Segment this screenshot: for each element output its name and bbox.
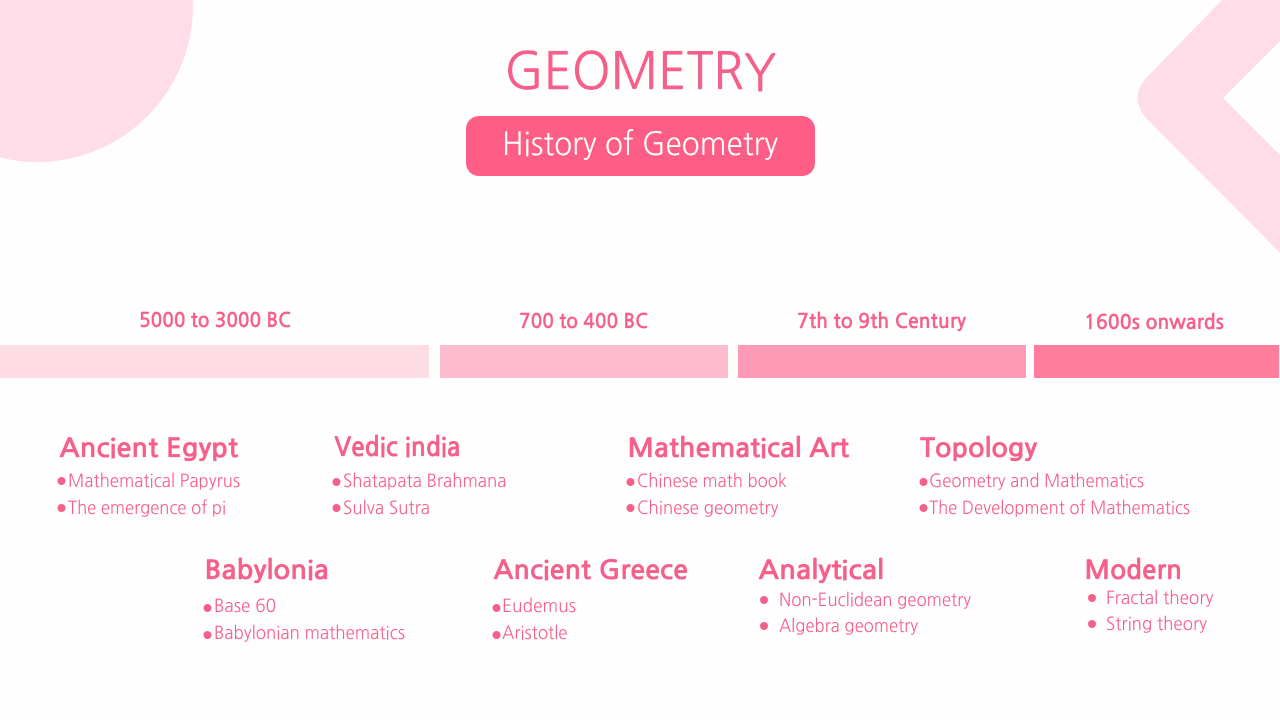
topic: Vedic india <box>332 434 506 517</box>
topic: Mathematical Art: Chinese math book <box>637 472 786 490</box>
topic: Modern: String theory <box>1106 615 1208 633</box>
topic: Mathematical Art: Chinese geometry <box>637 499 779 517</box>
period 4 <box>1034 312 1279 378</box>
decorative circle top-left <box>0 0 193 162</box>
period 1: 5000 to 3000 BC <box>139 310 291 330</box>
topic: Ancient Greece: Ancient Greece <box>494 557 688 583</box>
topic: Babylonia: Babylonia <box>204 557 329 583</box>
topic: Ancient Greece <box>492 557 688 642</box>
topic: Ancient Greece: Eudemus <box>502 597 576 615</box>
period 3 <box>738 311 1026 378</box>
topic: Vedic india: Vedic india <box>334 434 460 460</box>
topic: Topology: The Development of Mathematics <box>929 499 1190 517</box>
topic: Analytical <box>758 557 972 635</box>
period 2: 700 to 400 BC <box>519 311 648 331</box>
topic: Mathematical Art: Mathematical Art <box>628 435 850 461</box>
topic: Ancient Egypt: Mathematical Papyrus <box>68 472 240 490</box>
topic: Babylonia: Base 60 <box>214 597 276 615</box>
period 1 <box>0 310 429 378</box>
topic: Analytical: Analytical <box>758 557 884 583</box>
topic: Babylonia: Babylonian mathematics <box>214 624 405 642</box>
topic: Mathematical Art <box>626 435 850 517</box>
subtitle badge <box>466 116 815 176</box>
period 4: 1600s onwards <box>1084 312 1224 332</box>
topic: Ancient Greece: Aristotle <box>502 624 568 642</box>
topic: Analytical: Non-Euclidean geometry <box>779 591 972 609</box>
topic: Modern <box>1084 557 1214 633</box>
topic: Babylonia <box>204 557 405 642</box>
topic: Modern: Modern <box>1084 557 1182 583</box>
decorative chevron top-right <box>1138 0 1280 253</box>
topic: Vedic india: Sulva Sutra <box>343 499 430 517</box>
topic: Ancient Egypt: Ancient Egypt <box>60 435 239 461</box>
topic: Vedic india: Shatapata Brahmana <box>343 472 506 490</box>
topic: Analytical: Algebra geometry <box>779 617 919 635</box>
topic: Topology: Geometry and Mathematics <box>929 472 1144 490</box>
period 2 <box>440 311 728 378</box>
period 3: 7th to 9th Century <box>797 311 967 332</box>
topic: Ancient Egypt: The emergence of pi <box>68 499 226 517</box>
topic: Topology: Topology <box>920 435 1038 461</box>
subtitle badge: History of Geometry <box>502 128 778 160</box>
topic: Ancient Egypt <box>58 435 240 517</box>
topic: Modern: Fractal theory <box>1106 589 1214 607</box>
timeline <box>0 310 1279 378</box>
topic: Topology <box>920 435 1190 517</box>
title: GEOMETRY <box>504 46 776 97</box>
